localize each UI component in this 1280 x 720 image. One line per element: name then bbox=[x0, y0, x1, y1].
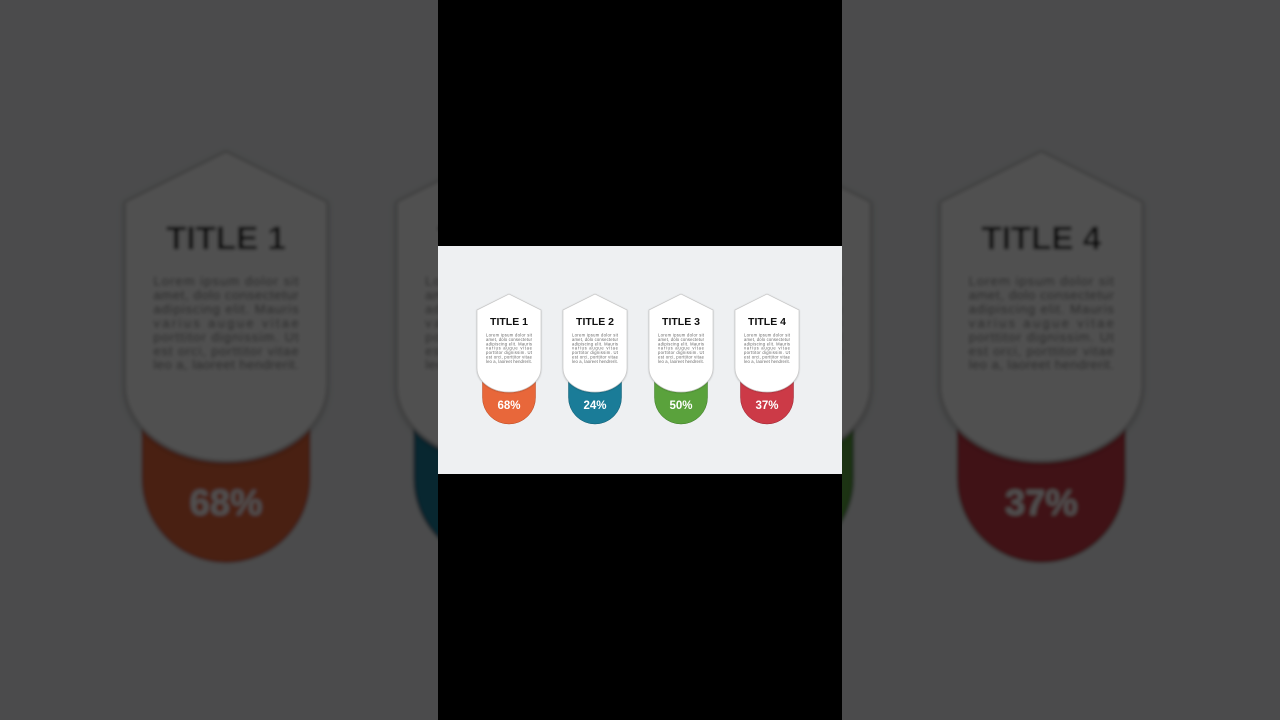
black video strip bbox=[438, 0, 842, 720]
blurred enlarged background copy: TITLE 3 bbox=[710, 220, 829, 257]
body text 3: Lorem ipsum dolor sit bbox=[658, 332, 705, 338]
title 1: TITLE 1 bbox=[490, 316, 528, 328]
body text 2: est orci, porttitor vitae bbox=[572, 354, 619, 360]
body text 4: amet, dolo consectetur bbox=[744, 337, 791, 342]
blurred enlarged background copy: amet, dolo consectetur bbox=[425, 288, 571, 303]
body text 2: leo a, laoreet hendrerit. bbox=[572, 359, 618, 364]
shield card 3 bbox=[649, 294, 713, 392]
blurred enlarged background copy: TITLE 2 bbox=[438, 220, 558, 257]
body text 4: est orci, porttitor vitae bbox=[744, 354, 791, 360]
body text 2 bbox=[572, 332, 619, 364]
body text 2: porttitor dignissim. Ut bbox=[572, 350, 619, 355]
blurred enlarged background copy: amet, dolo consectetur bbox=[697, 288, 843, 303]
body text 2: varius augue vitae bbox=[572, 346, 619, 351]
blurred enlarged background copy: 37% bbox=[1005, 482, 1078, 523]
shield card 2 bbox=[563, 294, 627, 392]
title 4: TITLE 4 bbox=[748, 316, 786, 328]
body text 1: est orci, porttitor vitae bbox=[486, 354, 533, 360]
body text 3: porttitor dignissim. Ut bbox=[658, 350, 705, 355]
body text 2: adipiscing elit. Mauris bbox=[572, 341, 618, 346]
body text 4 bbox=[744, 332, 791, 364]
blurred enlarged background copy: adipiscing elit. Mauris bbox=[697, 302, 843, 317]
blurred enlarged background copy: amet, dolo consectetur bbox=[153, 288, 299, 303]
body text 4: varius augue vitae bbox=[744, 346, 791, 351]
body text 3: adipiscing elit. Mauris bbox=[658, 341, 704, 346]
blurred enlarged background copy: porttitor dignissim. Ut bbox=[153, 329, 299, 344]
blurred enlarged background copy: porttitor dignissim. Ut bbox=[425, 329, 571, 344]
value 24%: 24% bbox=[583, 400, 607, 412]
body text 2: amet, dolo consectetur bbox=[572, 337, 619, 342]
body text 1: leo a, laoreet hendrerit. bbox=[486, 359, 532, 364]
body text 1: porttitor dignissim. Ut bbox=[486, 350, 533, 355]
blurred enlarged background copy: adipiscing elit. Mauris bbox=[425, 302, 571, 317]
blurred enlarged background copy: Lorem ipsum dolor sit bbox=[969, 274, 1114, 289]
blurred enlarged background copy: varius augue vitae bbox=[153, 315, 299, 330]
title 3: TITLE 3 bbox=[662, 316, 700, 328]
blurred enlarged background copy: varius augue vitae bbox=[969, 315, 1114, 330]
card 2: 24% bbox=[563, 294, 627, 424]
shield card 4 bbox=[735, 294, 799, 392]
pill: green bbox=[654, 365, 708, 424]
blurred enlarged background copy: leo a, laoreet hendrerit. bbox=[153, 357, 299, 372]
value 50%: 50% bbox=[669, 400, 693, 412]
body text 4: leo a, laoreet hendrerit. bbox=[744, 359, 790, 364]
body text 4: adipiscing elit. Mauris bbox=[744, 341, 790, 346]
body text 4: porttitor dignissim. Ut bbox=[744, 350, 791, 355]
blurred enlarged background copy: leo a, laoreet hendrerit. bbox=[425, 357, 570, 372]
blurred enlarged background copy: leo a, laoreet hendrerit. bbox=[969, 357, 1114, 372]
blurred enlarged background copy: est orci, porttitor vitae bbox=[425, 343, 570, 358]
body text 4: Lorem ipsum dolor sit bbox=[744, 332, 791, 338]
body text 1: adipiscing elit. Mauris bbox=[486, 341, 532, 346]
card 1: 68% bbox=[477, 294, 541, 424]
blurred enlarged background copy: leo a, laoreet hendrerit. bbox=[697, 357, 842, 372]
blurred enlarged background copy: 50% bbox=[733, 482, 806, 523]
slide panel bbox=[438, 246, 842, 474]
body text 3: leo a, laoreet hendrerit. bbox=[658, 359, 704, 364]
body text 3 bbox=[658, 332, 705, 364]
blurred enlarged background copy: Lorem ipsum dolor sit bbox=[697, 274, 843, 289]
body text 2: Lorem ipsum dolor sit bbox=[572, 332, 619, 338]
body text 3: est orci, porttitor vitae bbox=[658, 354, 705, 360]
body text 1: Lorem ipsum dolor sit bbox=[486, 332, 533, 338]
pill: orange bbox=[482, 365, 536, 424]
blurred enlarged background copy: Lorem ipsum dolor sit bbox=[425, 274, 571, 289]
body text 1 bbox=[486, 332, 533, 364]
shield card 1 bbox=[477, 294, 541, 392]
pill: blue bbox=[568, 365, 622, 424]
blurred enlarged background copy: TITLE 4 bbox=[981, 220, 1102, 257]
blurred enlarged background copy: Lorem ipsum dolor sit bbox=[153, 274, 299, 289]
blurred enlarged background copy: porttitor dignissim. Ut bbox=[969, 329, 1114, 344]
blurred enlarged background copy: adipiscing elit. Mauris bbox=[153, 302, 299, 317]
blurred enlarged background copy: 24% bbox=[461, 482, 534, 523]
blurred enlarged background copy: varius augue vitae bbox=[425, 315, 570, 330]
body text 1: amet, dolo consectetur bbox=[486, 337, 533, 342]
title 2: TITLE 2 bbox=[576, 316, 614, 328]
blurred enlarged background copy: est orci, porttitor vitae bbox=[697, 343, 842, 358]
blurred enlarged background copy: TITLE 1 bbox=[166, 220, 286, 257]
blurred enlarged background copy: 68% bbox=[190, 482, 262, 523]
value 68%: 68% bbox=[497, 400, 521, 412]
blurred enlarged background copy: varius augue vitae bbox=[697, 315, 842, 330]
card 4: 37% bbox=[735, 294, 799, 424]
body text 1: varius augue vitae bbox=[486, 346, 533, 351]
blurred enlarged background copy: est orci, porttitor vitae bbox=[153, 343, 299, 358]
blurred enlarged background copy: adipiscing elit. Mauris bbox=[969, 302, 1114, 317]
value 37%: 37% bbox=[755, 400, 779, 412]
pill: red bbox=[740, 365, 794, 424]
body text 3: varius augue vitae bbox=[658, 346, 705, 351]
card 3: 50% bbox=[649, 294, 713, 424]
blurred enlarged background copy: amet, dolo consectetur bbox=[969, 288, 1115, 303]
blurred enlarged background copy: porttitor dignissim. Ut bbox=[697, 329, 843, 344]
body text 3: amet, dolo consectetur bbox=[658, 337, 705, 342]
blurred enlarged background copy: est orci, porttitor vitae bbox=[969, 343, 1114, 358]
